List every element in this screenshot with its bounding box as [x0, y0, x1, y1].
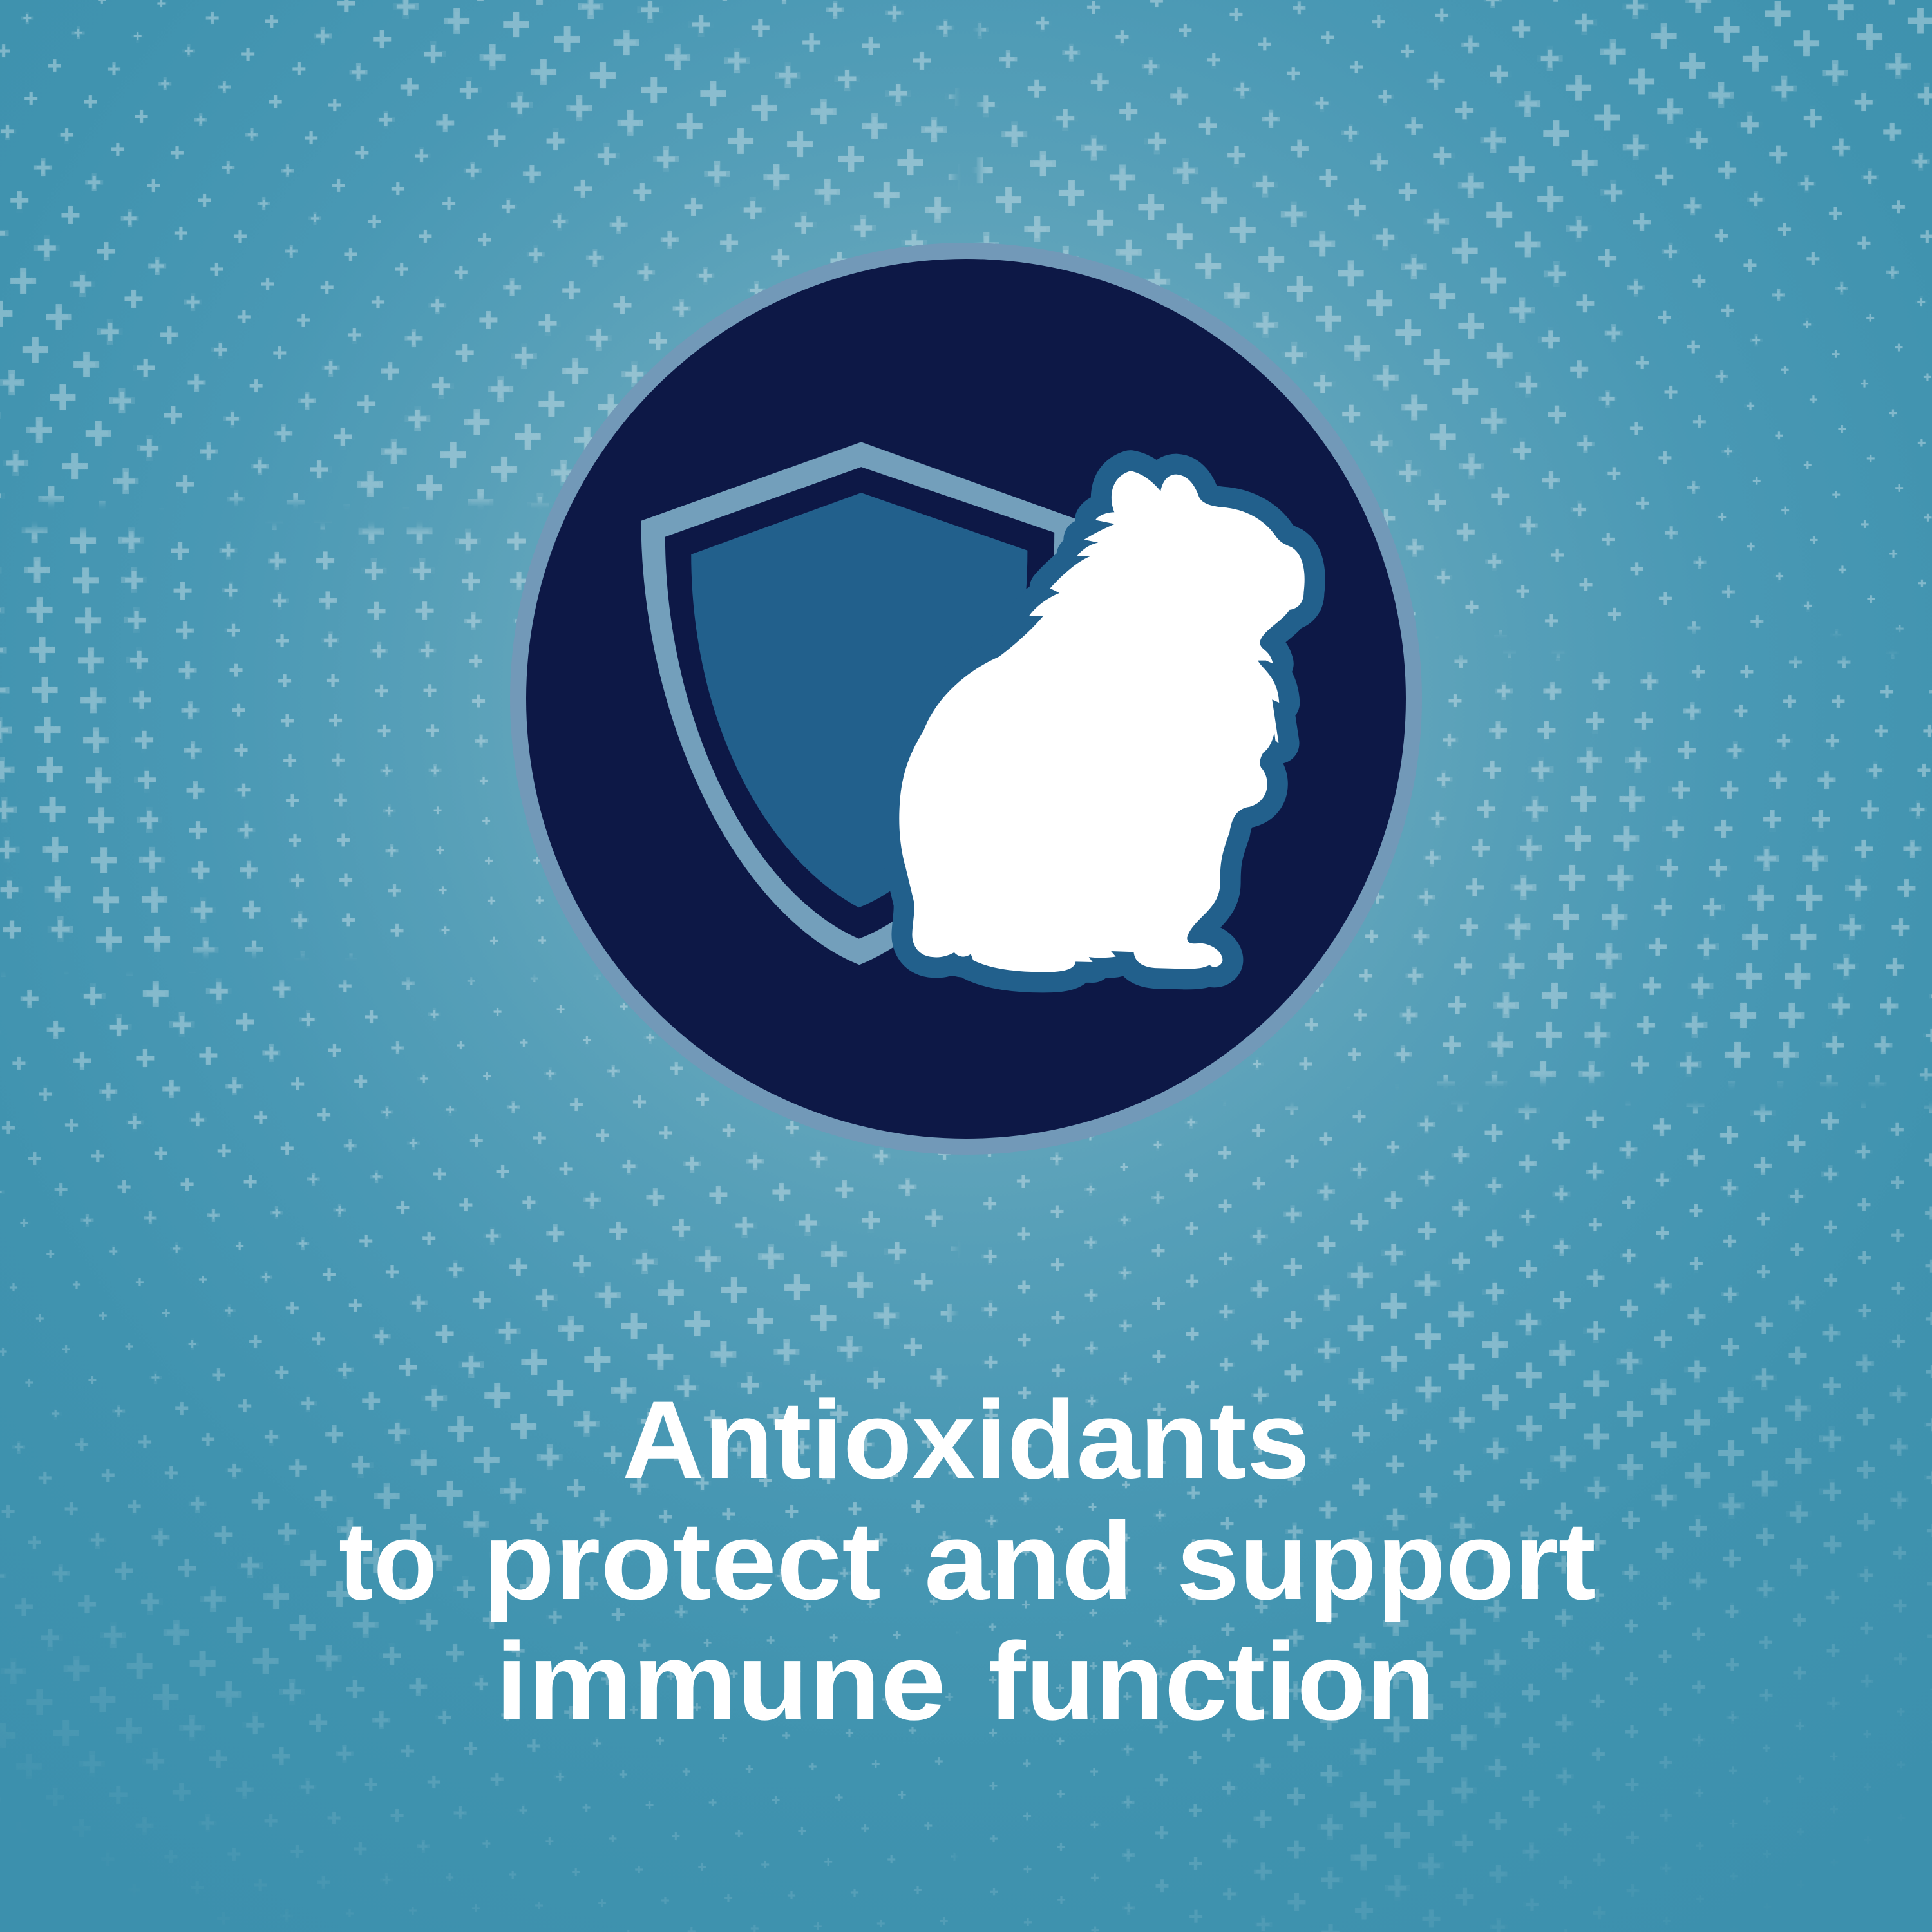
title line 3: function	[988, 1620, 1435, 1743]
title text	[339, 1378, 1596, 1743]
title line 2: to	[339, 1499, 437, 1623]
icon: shield	[641, 442, 1081, 965]
title line 3: immune	[495, 1620, 946, 1743]
title line 3	[495, 1620, 1435, 1743]
icon badge: navy circle with shield and hamster	[510, 243, 1422, 1155]
icon: hamster silhouette	[899, 471, 1305, 972]
title line 2: support	[1177, 1499, 1596, 1623]
badge navy disc	[526, 259, 1406, 1139]
title line 2	[339, 1499, 1596, 1623]
title line 1: Antioxidants	[622, 1378, 1310, 1502]
badge outer ring	[510, 243, 1422, 1155]
title line 2: and	[924, 1499, 1133, 1623]
title line 2: protect	[483, 1499, 881, 1623]
